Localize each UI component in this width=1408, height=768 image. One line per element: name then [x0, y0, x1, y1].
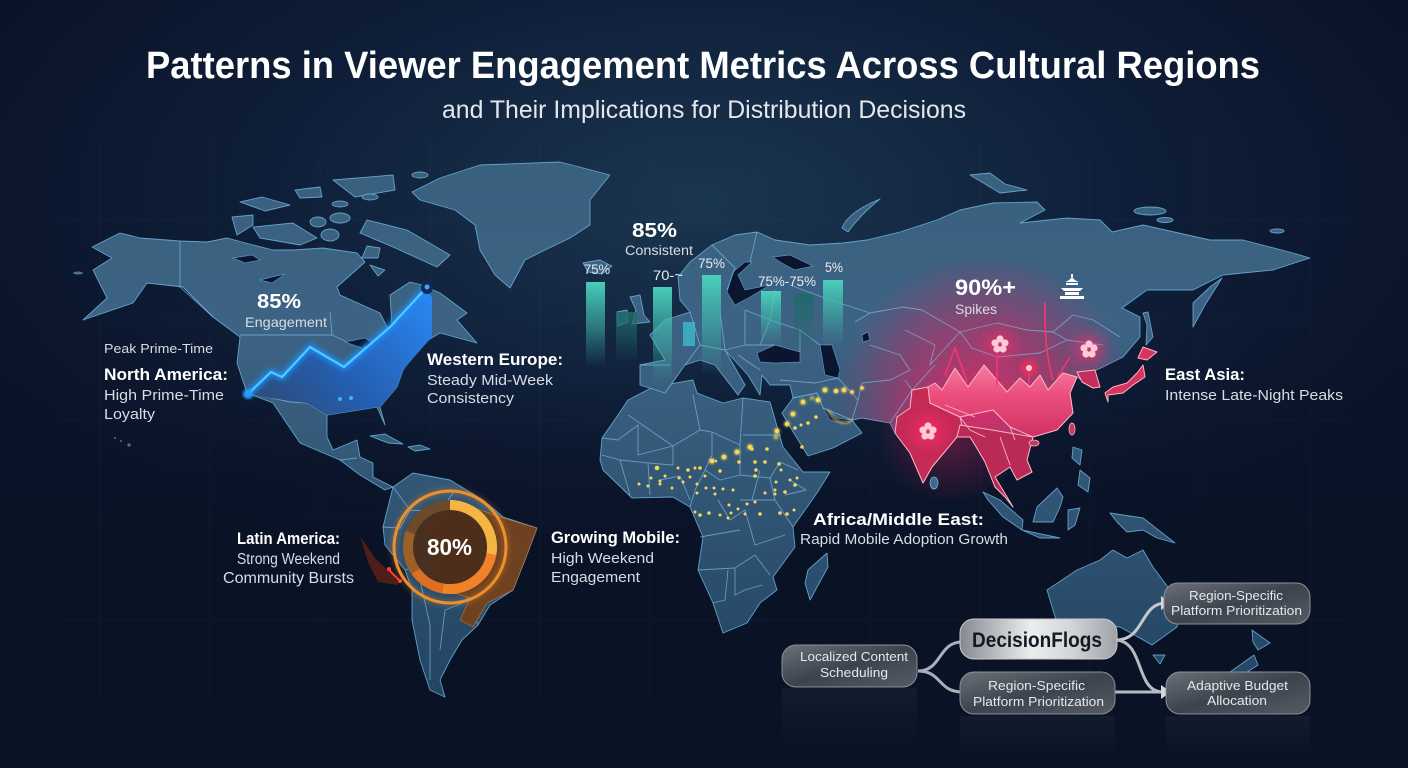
Middle East and Africa mobile dots — [638, 386, 864, 519]
Growing Mobile label: Engagement — [551, 569, 641, 586]
bar values — [584, 256, 843, 289]
Asia country borders — [855, 307, 1120, 423]
Latin America label: Latin America: — [237, 530, 340, 548]
East Asia label: East Asia: — [1165, 366, 1245, 384]
bar values: 75% — [698, 256, 725, 271]
red pulse dot — [1021, 360, 1037, 376]
box: Localized Content Scheduling — [782, 645, 917, 687]
ring glow — [394, 491, 506, 603]
Africa and Middle East label: Rapid Mobile Adoption Growth — [800, 531, 1008, 548]
icon: pagoda — [1060, 274, 1084, 299]
Taiwan, Hainan and Sri Lanka — [930, 423, 1075, 489]
box: DecisionFlogs: DecisionFlogs — [972, 629, 1102, 652]
spike lines — [945, 302, 1070, 385]
North America label: North America: — [104, 366, 228, 384]
metric 90%+: 90%+ — [955, 275, 1016, 300]
arrowheads — [960, 596, 1171, 699]
bar values: 75%-75% — [758, 274, 816, 289]
North America borders — [180, 241, 357, 460]
Canadian arctic islands — [232, 172, 450, 276]
Pacific islets — [73, 272, 131, 447]
bar values: 75% — [584, 262, 610, 277]
box: Region-Specific Platform Prioritization (lower): Platform Prioritization — [973, 695, 1104, 709]
Iceland — [583, 260, 612, 274]
North America label: High Prime-Time — [104, 387, 224, 404]
glowing line — [248, 287, 427, 394]
Western Europe label: Western Europe: — [427, 351, 563, 369]
British Isles — [617, 295, 650, 326]
world map — [73, 162, 1310, 697]
box: Region-Specific Platform Prioritization (lower) — [960, 672, 1115, 714]
arrow: scheduling to decision — [918, 642, 962, 671]
subtitle: and Their Implications for Distribution Decisions — [442, 96, 966, 124]
North America label — [104, 341, 228, 423]
box: Region-Specific Platform Prioritization (upper): Region-Specific — [1189, 589, 1283, 603]
box: Localized Content Scheduling: Localized Content — [800, 650, 909, 664]
metric 85% consistent: 85% — [632, 220, 677, 242]
box: Localized Content Scheduling: Scheduling — [820, 666, 888, 680]
North America label: Peak Prime-Time — [104, 341, 213, 356]
East Asia label: Intense Late-Night Peaks — [1165, 387, 1343, 404]
red glow over South and East Asia — [842, 262, 1120, 498]
Eurasia — [640, 202, 1310, 507]
Growing Mobile label: High Weekend — [551, 550, 654, 567]
Tasmania and New Zealand — [1153, 630, 1270, 680]
Africa country borders — [602, 395, 806, 603]
spikes caption: Spikes — [955, 301, 997, 317]
Australia — [1047, 550, 1180, 645]
flower markers — [913, 330, 1103, 446]
arrow: platform to budget — [1115, 690, 1165, 694]
donut progress segments — [408, 505, 492, 589]
Africa and Middle East label — [800, 511, 1008, 548]
blue filled area — [248, 287, 432, 415]
Europe bar chart — [584, 220, 843, 385]
box: Region-Specific Platform Prioritization (upper) — [1164, 583, 1310, 624]
North America engagement chart — [243, 282, 433, 415]
metric 85%: 85% — [257, 291, 301, 313]
India and Southeast Asia borders — [945, 405, 1015, 465]
line end markers — [243, 282, 433, 401]
Latin America label — [223, 530, 354, 587]
box: Adaptive Budget Allocation: Allocation — [1207, 694, 1267, 708]
bar values: 70-~ — [653, 268, 683, 283]
North America lakes — [233, 255, 395, 362]
Latin America label: Community Bursts — [223, 570, 354, 587]
engagement caption: Engagement — [245, 314, 327, 330]
Caribbean islands — [370, 434, 430, 451]
community burst shape — [360, 536, 402, 585]
North America label: Loyalty — [104, 406, 156, 423]
box: Adaptive Budget Allocation — [1166, 672, 1310, 714]
Island Southeast Asia — [983, 278, 1222, 543]
Latin America weekend ring — [360, 491, 537, 627]
Africa — [600, 380, 830, 633]
box reflections — [782, 688, 1310, 756]
East Asia label — [1165, 366, 1343, 404]
Latin America label: Strong Weekend — [237, 551, 340, 568]
East Asia spike chart — [913, 274, 1103, 446]
North America land — [83, 233, 477, 490]
box: Region-Specific Platform Prioritization (upper): Platform Prioritization — [1171, 604, 1302, 618]
Arabia — [782, 393, 862, 456]
Greenland — [412, 162, 610, 288]
Western Europe label: Consistency — [427, 390, 515, 407]
South America — [383, 473, 537, 697]
Brazil highlight — [425, 500, 537, 627]
metric 80%: 80% — [427, 534, 472, 560]
inland and marginal seas — [727, 255, 870, 424]
Europe country borders — [640, 232, 870, 420]
title: Patterns in Viewer Engagement Metrics Across Cultural Regions — [146, 45, 1260, 87]
Western Europe label: Steady Mid-Week — [427, 372, 554, 389]
bar values: 5% — [825, 260, 843, 275]
decision flow — [782, 583, 1310, 756]
box: Region-Specific Platform Prioritization (lower): Region-Specific — [988, 679, 1085, 693]
Western Europe label — [427, 351, 563, 407]
arrow: decision to top platform — [1116, 603, 1166, 640]
Madagascar — [805, 553, 828, 600]
Europe bar chart: Consistent — [625, 243, 693, 258]
box: Adaptive Budget Allocation: Adaptive Budget — [1187, 679, 1289, 693]
arrow: decision to budget — [1116, 640, 1163, 692]
Novaya Zemlya and arctic islands — [842, 173, 1284, 233]
East Asia highlighted countries — [895, 347, 1157, 507]
arrow: scheduling to platform — [918, 671, 962, 692]
Growing Mobile label: Growing Mobile: — [551, 529, 680, 547]
Africa and Middle East label: Africa/Middle East: — [813, 511, 984, 529]
Growing Mobile label — [551, 529, 680, 586]
box: DecisionFlogs — [960, 619, 1117, 659]
